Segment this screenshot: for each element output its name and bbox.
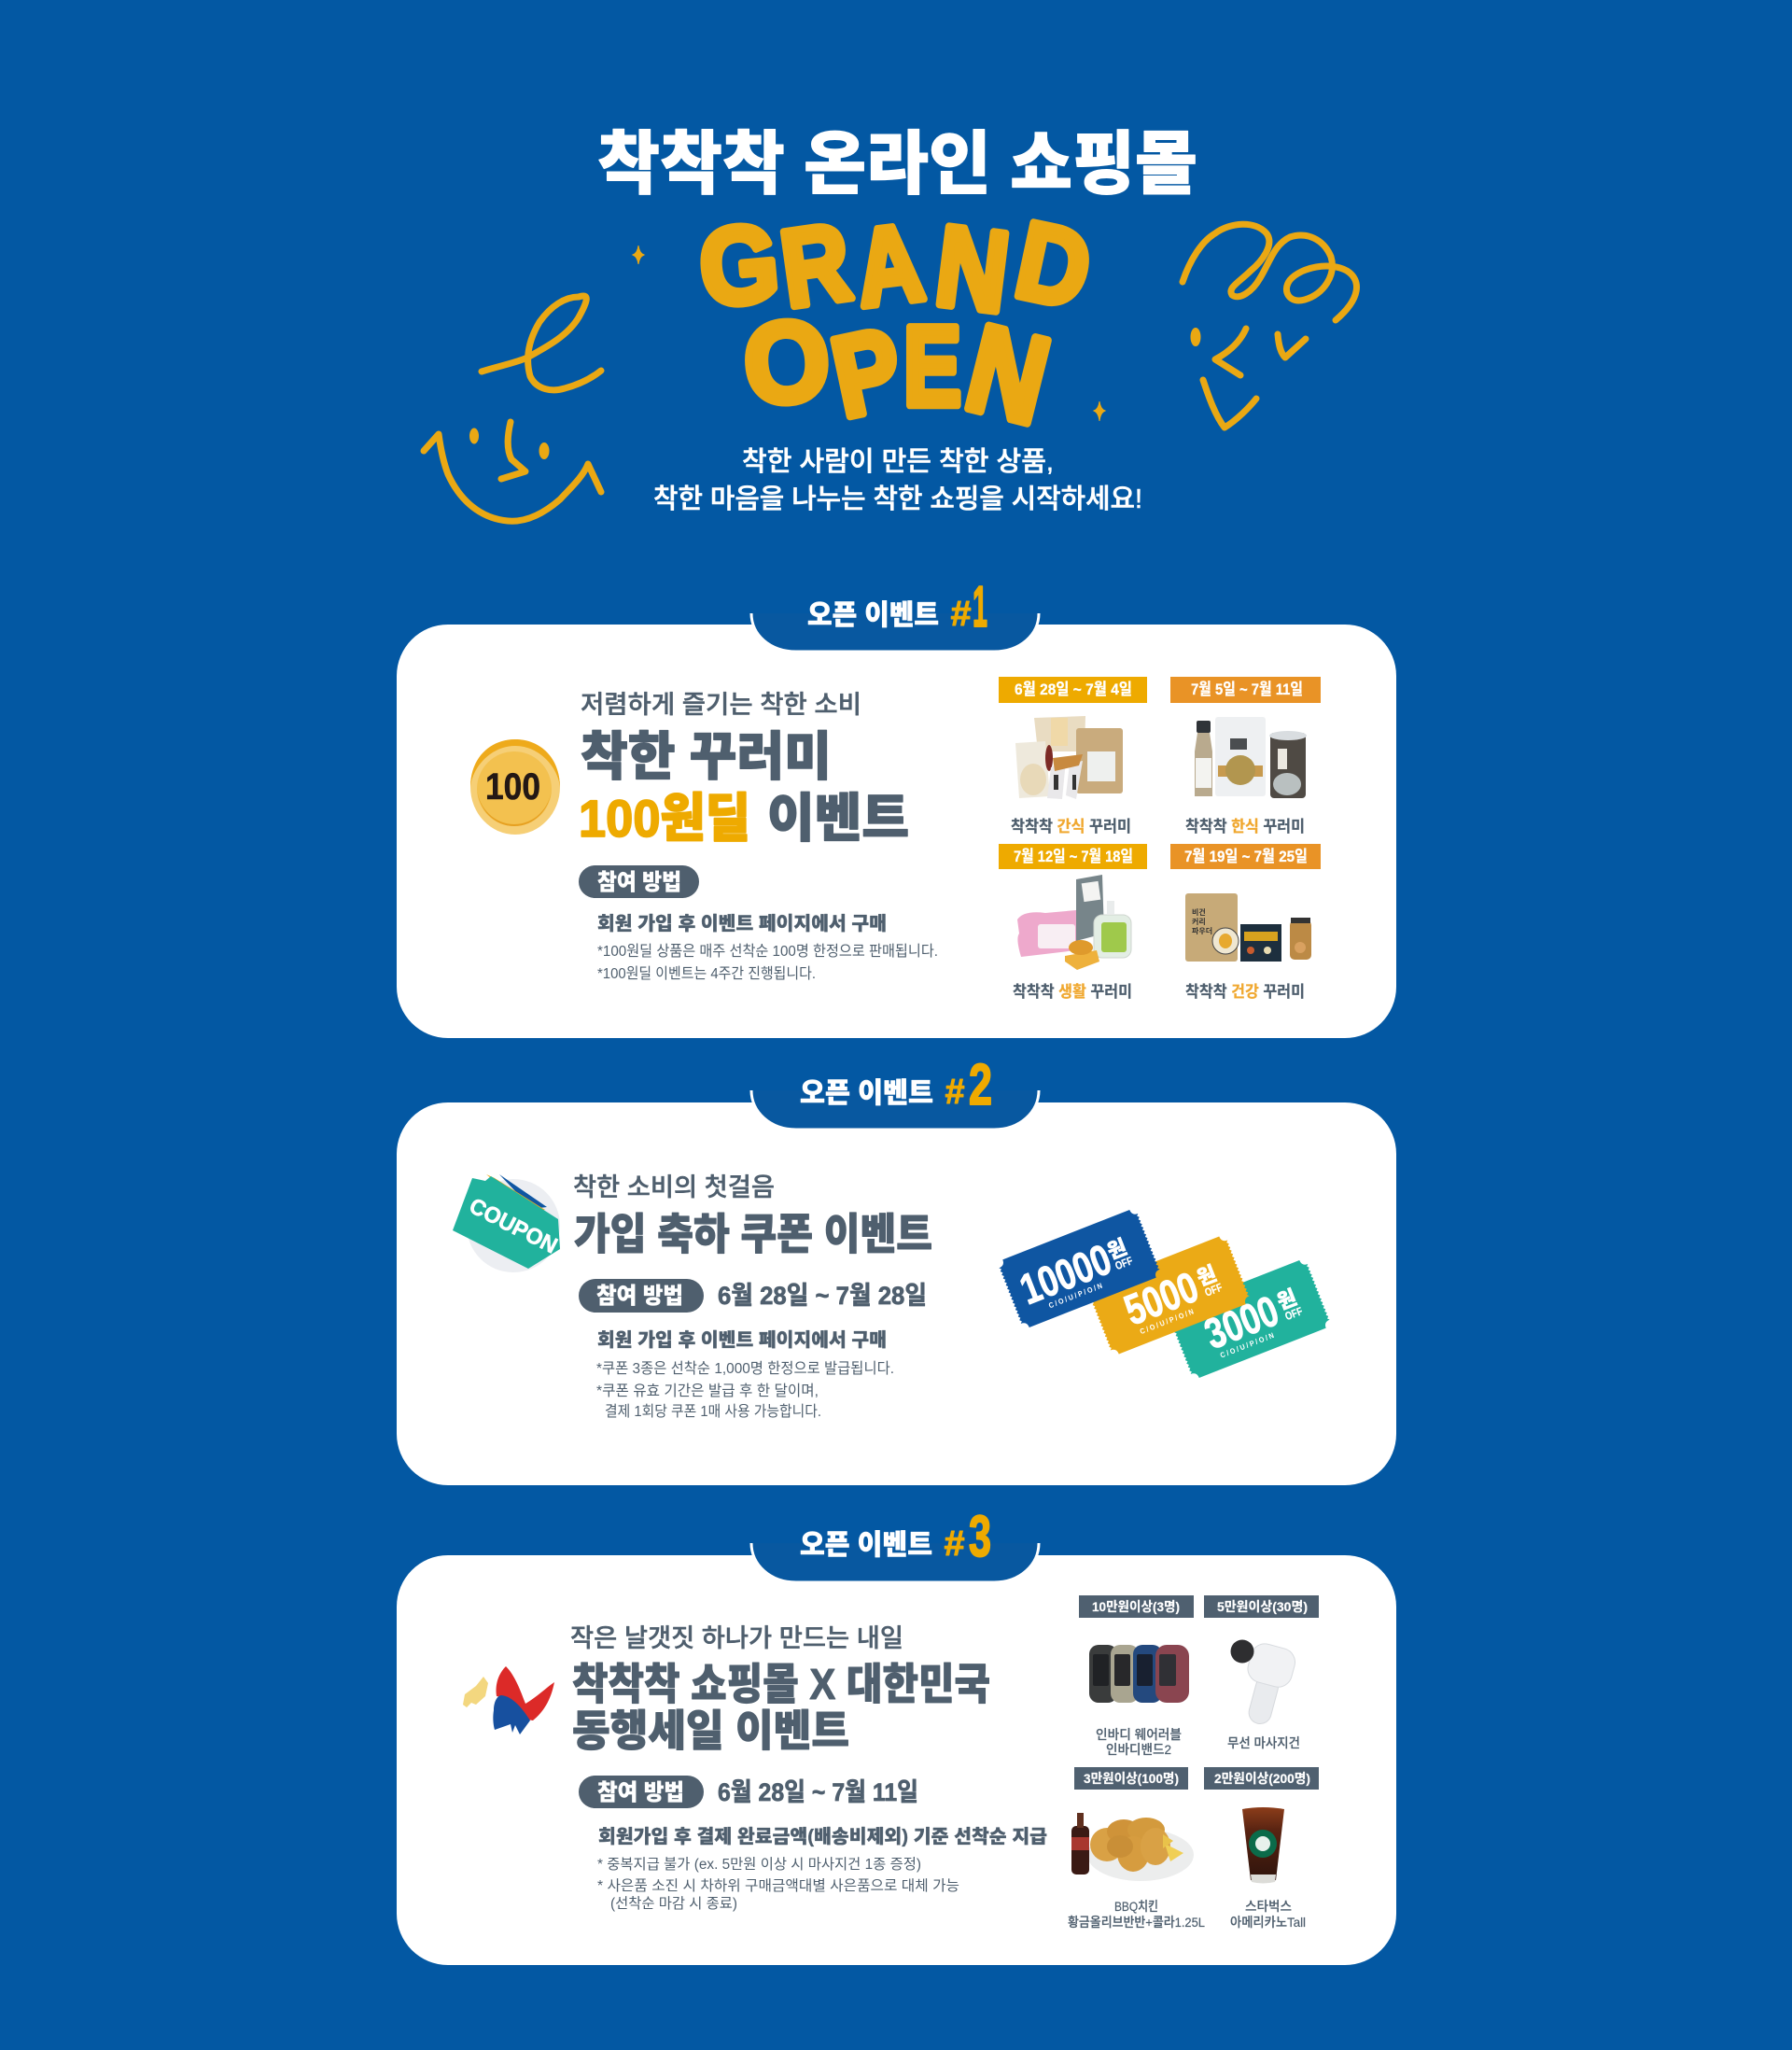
product: snack bundle — [999, 677, 1147, 799]
text: event 2 instructions — [596, 1329, 894, 1420]
prize: starbucks americano: 스타벅스 — [1245, 1899, 1292, 1914]
text: event 3 headline — [570, 1624, 990, 1755]
subtitle: 착한 사람이 만든 착한 상품, — [742, 446, 1054, 477]
pill: how to join — [579, 865, 699, 898]
tab: event 2: 오픈 이벤트 — [800, 1078, 933, 1109]
product: health bundle: 7월 19일 ~ 7월 25일 — [1184, 848, 1308, 865]
tab: event 2 — [751, 1053, 1039, 1130]
panel: event 2 — [397, 1053, 1396, 1485]
text: event 3 headline: 동행세일 이벤트 — [572, 1706, 849, 1755]
product: health bundle: 비건 — [1192, 907, 1206, 917]
pill: how to join: 참여 방법 — [597, 870, 681, 895]
pill: how to join with dates: 참여 방법 — [597, 1780, 684, 1805]
icon: coupon: COUPON — [465, 1193, 561, 1259]
doodle: smile left — [424, 422, 601, 521]
text: event 3 instructions — [597, 1826, 1047, 1912]
coupon: 10000: OFF — [1113, 1254, 1135, 1272]
coupon: 5000: OFF — [1203, 1281, 1225, 1299]
icon: sparkle right — [1094, 401, 1105, 421]
product: health bundle: 파우더 — [1192, 927, 1212, 935]
product: korean food bundle: 7월 5일 ~ 7월 11일 — [1191, 681, 1303, 698]
doodle: face right — [1191, 328, 1306, 428]
coupon: 5000: C / O / U / P / O / N — [1139, 1307, 1195, 1336]
caption: snack: 착착착 간식 꾸러미 — [1011, 818, 1131, 835]
pill: how to join with dates: 참여 방법 — [596, 1284, 683, 1309]
product: living bundle — [999, 844, 1147, 970]
text: event 3 instructions: (선착순 마감 시 종료) — [610, 1895, 737, 1912]
tab: event 1: 오픈 이벤트 — [807, 600, 939, 631]
prize: starbucks americano: 아메리카노Tall — [1230, 1915, 1306, 1930]
text: event 1 headline: 이벤트 — [767, 789, 909, 848]
heading: GRAND OPEN: A — [849, 200, 930, 330]
doodle: letter e — [482, 296, 601, 390]
tab: event 3: 오픈 이벤트 — [800, 1530, 932, 1561]
pill: how to join with dates: 6월 28일 ~ 7월 28일 — [718, 1282, 927, 1310]
text: event 1 headline: 착한 꾸러미 — [581, 727, 832, 786]
coupon: 5000 — [1086, 1234, 1252, 1356]
coupon: 10000: 10000 — [1014, 1234, 1118, 1313]
icon: sparkle left — [633, 246, 644, 264]
tab: event 2: # — [945, 1073, 965, 1112]
tab: event 1: 1 — [973, 575, 987, 639]
panel: event 3 — [397, 1505, 1396, 1965]
text: event 1 headline — [579, 691, 909, 848]
prize: wearable band: 인바디 웨어러블 — [1096, 1727, 1182, 1742]
product: snack bundle: 6월 28일 ~ 7월 4일 — [1015, 681, 1132, 698]
text: event 2 headline: 가입 축하 쿠폰 이벤트 — [574, 1210, 932, 1258]
doodle: curls right — [1183, 224, 1356, 320]
prize: starbucks americano: 2만원이상(200명) — [1214, 1771, 1310, 1786]
heading: GRAND OPEN: N — [930, 203, 1015, 337]
text: event 2 headline — [573, 1173, 932, 1258]
text: event 3 instructions: * 중복지급 불가 (ex. 5만원 이상 시 마사지건 1종 증정) — [597, 1856, 921, 1873]
icon: 100 coin: 100 — [485, 766, 540, 807]
caption: korean food: 착착착 한식 꾸러미 — [1185, 818, 1305, 835]
pill: how to join with dates — [579, 1776, 918, 1808]
tab: event 2: 2 — [969, 1053, 992, 1117]
text: event 2 instructions: 결제 1회당 쿠폰 1매 사용 가능합니다. — [605, 1403, 821, 1420]
tab: event 3: # — [944, 1524, 965, 1564]
text: event 1 instructions: *100원딜 상품은 매주 선착순 100명 한정으로 판매됩니다. — [597, 943, 938, 960]
tab: event 1: # — [950, 595, 972, 634]
coupon: 3000: OFF — [1283, 1304, 1305, 1323]
prize: massage gun: 무선 마사지건 — [1227, 1735, 1300, 1750]
heading: GRAND OPEN: D — [1006, 198, 1101, 332]
text: event 3 headline: 작은 날갯짓 하나가 만드는 내일 — [570, 1624, 903, 1652]
text: event 1 instructions: *100원딜 이벤트는 4주간 진행됩니다. — [597, 965, 816, 982]
panel: event 1 — [397, 575, 1396, 1038]
prize: chicken and cola: 황금올리브반반+콜라1.25L — [1068, 1915, 1205, 1930]
subtitle — [653, 446, 1142, 514]
prize: starbucks americano — [1204, 1767, 1319, 1930]
heading: GRAND OPEN: R — [774, 201, 858, 331]
coupon: 10000: C / O / U / P / O / N — [1047, 1282, 1104, 1310]
prize: wearable band: 10만원이상(3명) — [1092, 1599, 1180, 1614]
text: event 2 instructions: *쿠폰 유효 기간은 발급 후 한 달이며, — [596, 1383, 819, 1399]
text: event 2 instructions: *쿠폰 3종은 선착순 1,000명 한정으로 발급됩니다. — [596, 1360, 894, 1377]
coupon: 5000: 원 — [1194, 1262, 1220, 1290]
text: event 2 headline: 착한 소비의 첫걸음 — [573, 1173, 775, 1201]
prize: wearable band: 인바디밴드2 — [1106, 1742, 1171, 1757]
coupon: 3000: 원 — [1274, 1285, 1300, 1314]
heading: GRAND OPEN — [694, 198, 1101, 450]
icon: butterflies — [463, 1666, 554, 1734]
tab: event 3: 3 — [969, 1505, 991, 1569]
text: event 1 headline: 100원딜 — [579, 789, 750, 848]
title: 착착착 온라인 쇼핑몰 — [597, 125, 1197, 203]
coupon: 3000: C / O / U / P / O / N — [1219, 1331, 1275, 1360]
prize: chicken and cola — [1068, 1767, 1205, 1930]
coupon: 5000: 5000 — [1117, 1262, 1205, 1335]
product: health bundle: 커리 — [1192, 918, 1206, 926]
prize: wearable band — [1079, 1595, 1194, 1757]
product: health bundle — [1170, 844, 1321, 962]
coupon: 3000: 3000 — [1197, 1285, 1285, 1358]
icon: 100 coin — [470, 739, 560, 835]
text: event 3 headline: 착착착 쇼핑몰 X 대한민국 — [572, 1660, 990, 1708]
heading: GRAND OPEN: N — [955, 298, 1061, 450]
coupon: 10000: 원 — [1104, 1235, 1130, 1264]
heading: GRAND OPEN: E — [903, 302, 961, 429]
text: event 1 instructions: 회원 가입 후 이벤트 페이지에서 구매 — [597, 913, 887, 934]
product: living bundle: 7월 12일 ~ 7월 18일 — [1014, 848, 1133, 865]
heading: GRAND OPEN: P — [822, 304, 913, 442]
tab: event 3 — [751, 1505, 1039, 1582]
text: event 2 instructions: 회원 가입 후 이벤트 페이지에서 구매 — [597, 1329, 887, 1351]
caption: health: 착착착 건강 꾸러미 — [1185, 983, 1305, 1001]
caption: living: 착착착 생활 꾸러미 — [1013, 983, 1132, 1001]
pill: how to join with dates: 6월 28일 ~ 7월 11일 — [718, 1778, 918, 1806]
pill: how to join with dates — [579, 1279, 927, 1313]
prize: massage gun: 5만원이상(30명) — [1217, 1599, 1308, 1614]
text: event 3 instructions: 회원가입 후 결제 완료금액(배송비제외) 기준 선착순 지급 — [598, 1826, 1047, 1847]
subtitle: 착한 마음을 나누는 착한 쇼핑을 시작하세요! — [653, 484, 1142, 514]
prize: massage gun — [1204, 1595, 1319, 1750]
tab: event 1 — [751, 575, 1039, 652]
text: event 1 instructions — [597, 913, 938, 982]
heading: GRAND OPEN: G — [694, 201, 784, 330]
coupon: 3000 — [1167, 1257, 1332, 1381]
prize: chicken and cola: BBQ치킨 — [1114, 1899, 1158, 1914]
text: event 1 headline: 저렴하게 즐기는 착한 소비 — [581, 691, 861, 719]
text: event 3 instructions: * 사은품 소진 시 차하위 구매금액대별 사은품으로 대체 가능 — [597, 1877, 959, 1894]
prize: chicken and cola: 3만원이상(100명) — [1084, 1771, 1179, 1786]
icon: coupon — [453, 1174, 561, 1272]
coupon: 10000 — [997, 1207, 1162, 1330]
heading: GRAND OPEN: O — [740, 297, 833, 429]
product: korean food bundle — [1170, 677, 1321, 798]
